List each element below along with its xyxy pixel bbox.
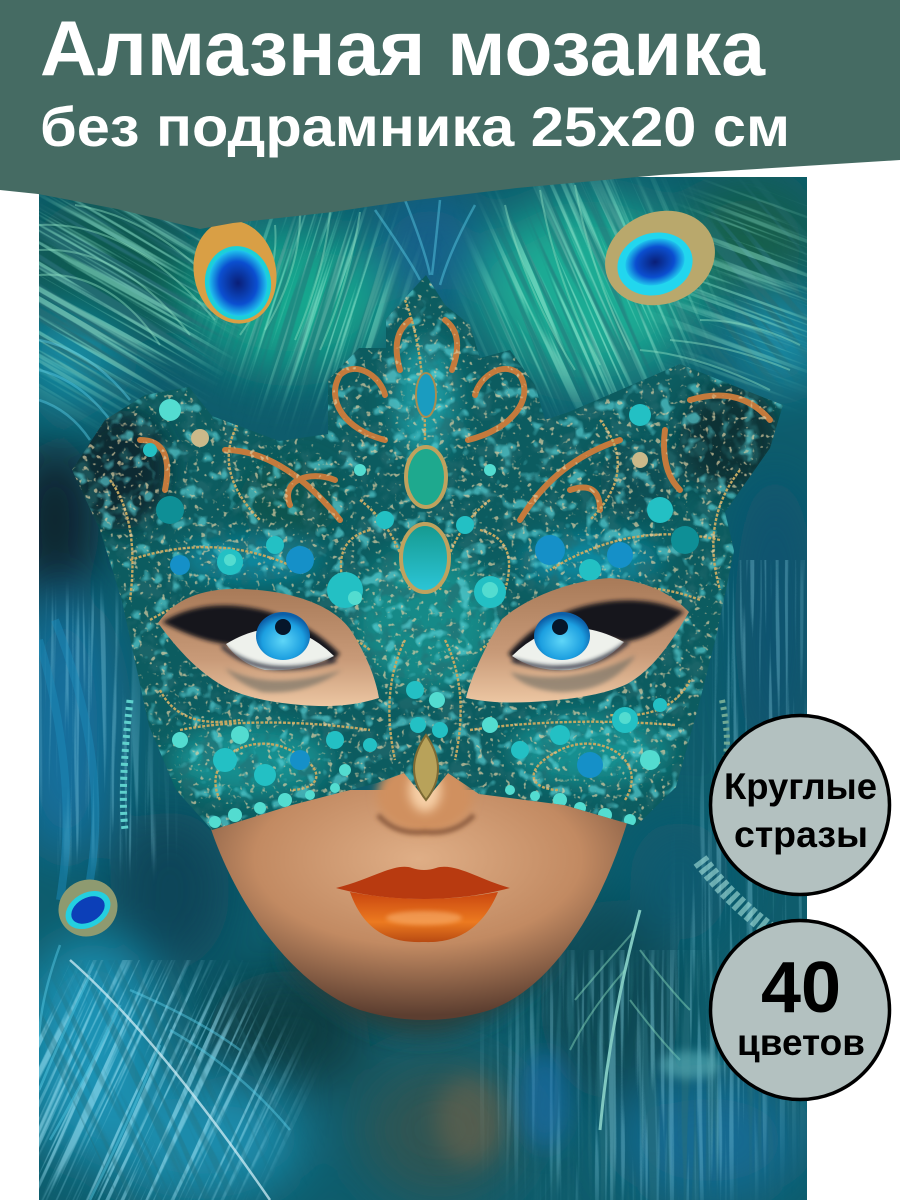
neck shadow: [280, 950, 560, 1035]
badge: round rhinestones: стразы: [734, 814, 868, 855]
nose ornament: [414, 735, 438, 800]
icon: peacock feather eye, left: [193, 222, 277, 324]
gem: upper green oval: [406, 447, 446, 507]
feathers: upper left: [39, 205, 360, 440]
badge: round rhinestones: Круглые: [724, 766, 877, 807]
left eye: [158, 589, 379, 706]
feathers: lower left: [39, 620, 290, 1200]
banner: [0, 0, 900, 229]
icon: small peacock feather eye: [58, 880, 118, 936]
badge: round rhinestones: [710, 716, 890, 894]
feather streak textures: [39, 177, 807, 1200]
right eye: [466, 578, 689, 703]
icon: peacock feather eye, right: [605, 210, 715, 306]
title: Алмазная мозаика: [40, 4, 766, 92]
nose: [377, 757, 474, 833]
gem: central cyan oval: [401, 524, 449, 592]
feathers: top centre and upper right: [375, 185, 800, 390]
badge: 40 colours: [710, 920, 890, 1100]
face: [200, 790, 636, 1020]
feathers: lower right: [435, 860, 770, 1165]
gold filigree: [110, 300, 740, 800]
earring: [722, 700, 727, 760]
gems scattered over mask: [143, 399, 699, 828]
mask mosaic texture: [76, 300, 774, 830]
mask tonal patches: [60, 270, 790, 840]
background colour fields: [10, 180, 825, 1200]
gem: crown teardrop: [416, 373, 436, 417]
badge: 40 colours: 40: [761, 948, 841, 1028]
badge: 40 colours: цветов: [737, 1022, 865, 1063]
mask: [60, 270, 790, 840]
copper scrolls: [140, 320, 770, 520]
subtitle: без подрамника 25х20 см: [40, 95, 790, 158]
illustration: peacock mask portrait: [39, 177, 807, 1200]
lips: [336, 867, 510, 942]
